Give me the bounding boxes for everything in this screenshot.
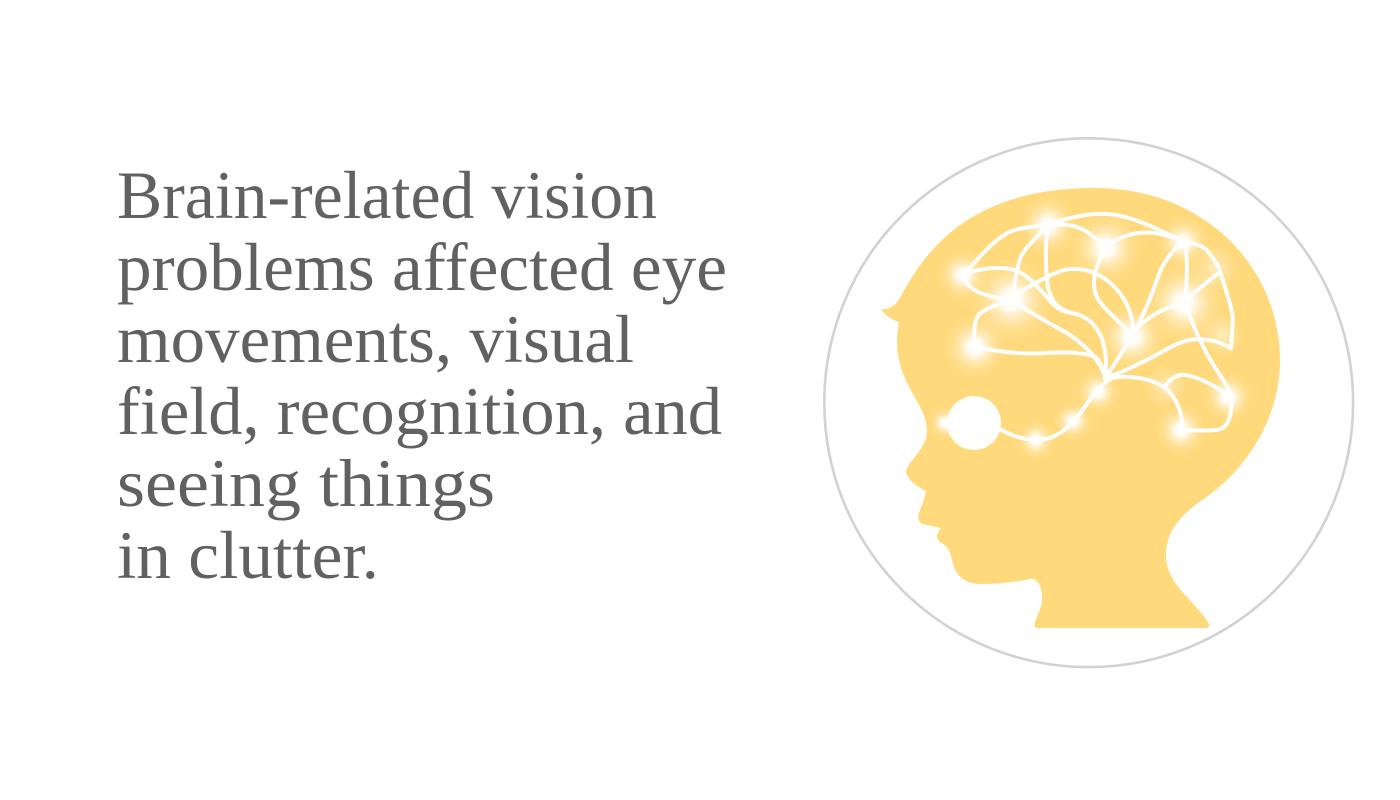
text block: main statement: seeing things: [117, 445, 495, 521]
text block: main statement: movements, visual: [117, 301, 634, 377]
icon: eye: [947, 396, 1001, 450]
text block: main statement: problems affected eye: [117, 229, 727, 305]
circle outline: [824, 138, 1353, 667]
text block: main statement: Brain-related vision: [117, 157, 657, 233]
text block: main statement: [117, 157, 727, 593]
icon: child head silhouette: [881, 188, 1280, 628]
icon: brain pathways: [963, 214, 1233, 440]
text block: main statement: field, recognition, and: [117, 373, 722, 449]
text block: main statement: in clutter.: [117, 517, 379, 593]
icon: neural network glow nodes: [928, 195, 1254, 460]
